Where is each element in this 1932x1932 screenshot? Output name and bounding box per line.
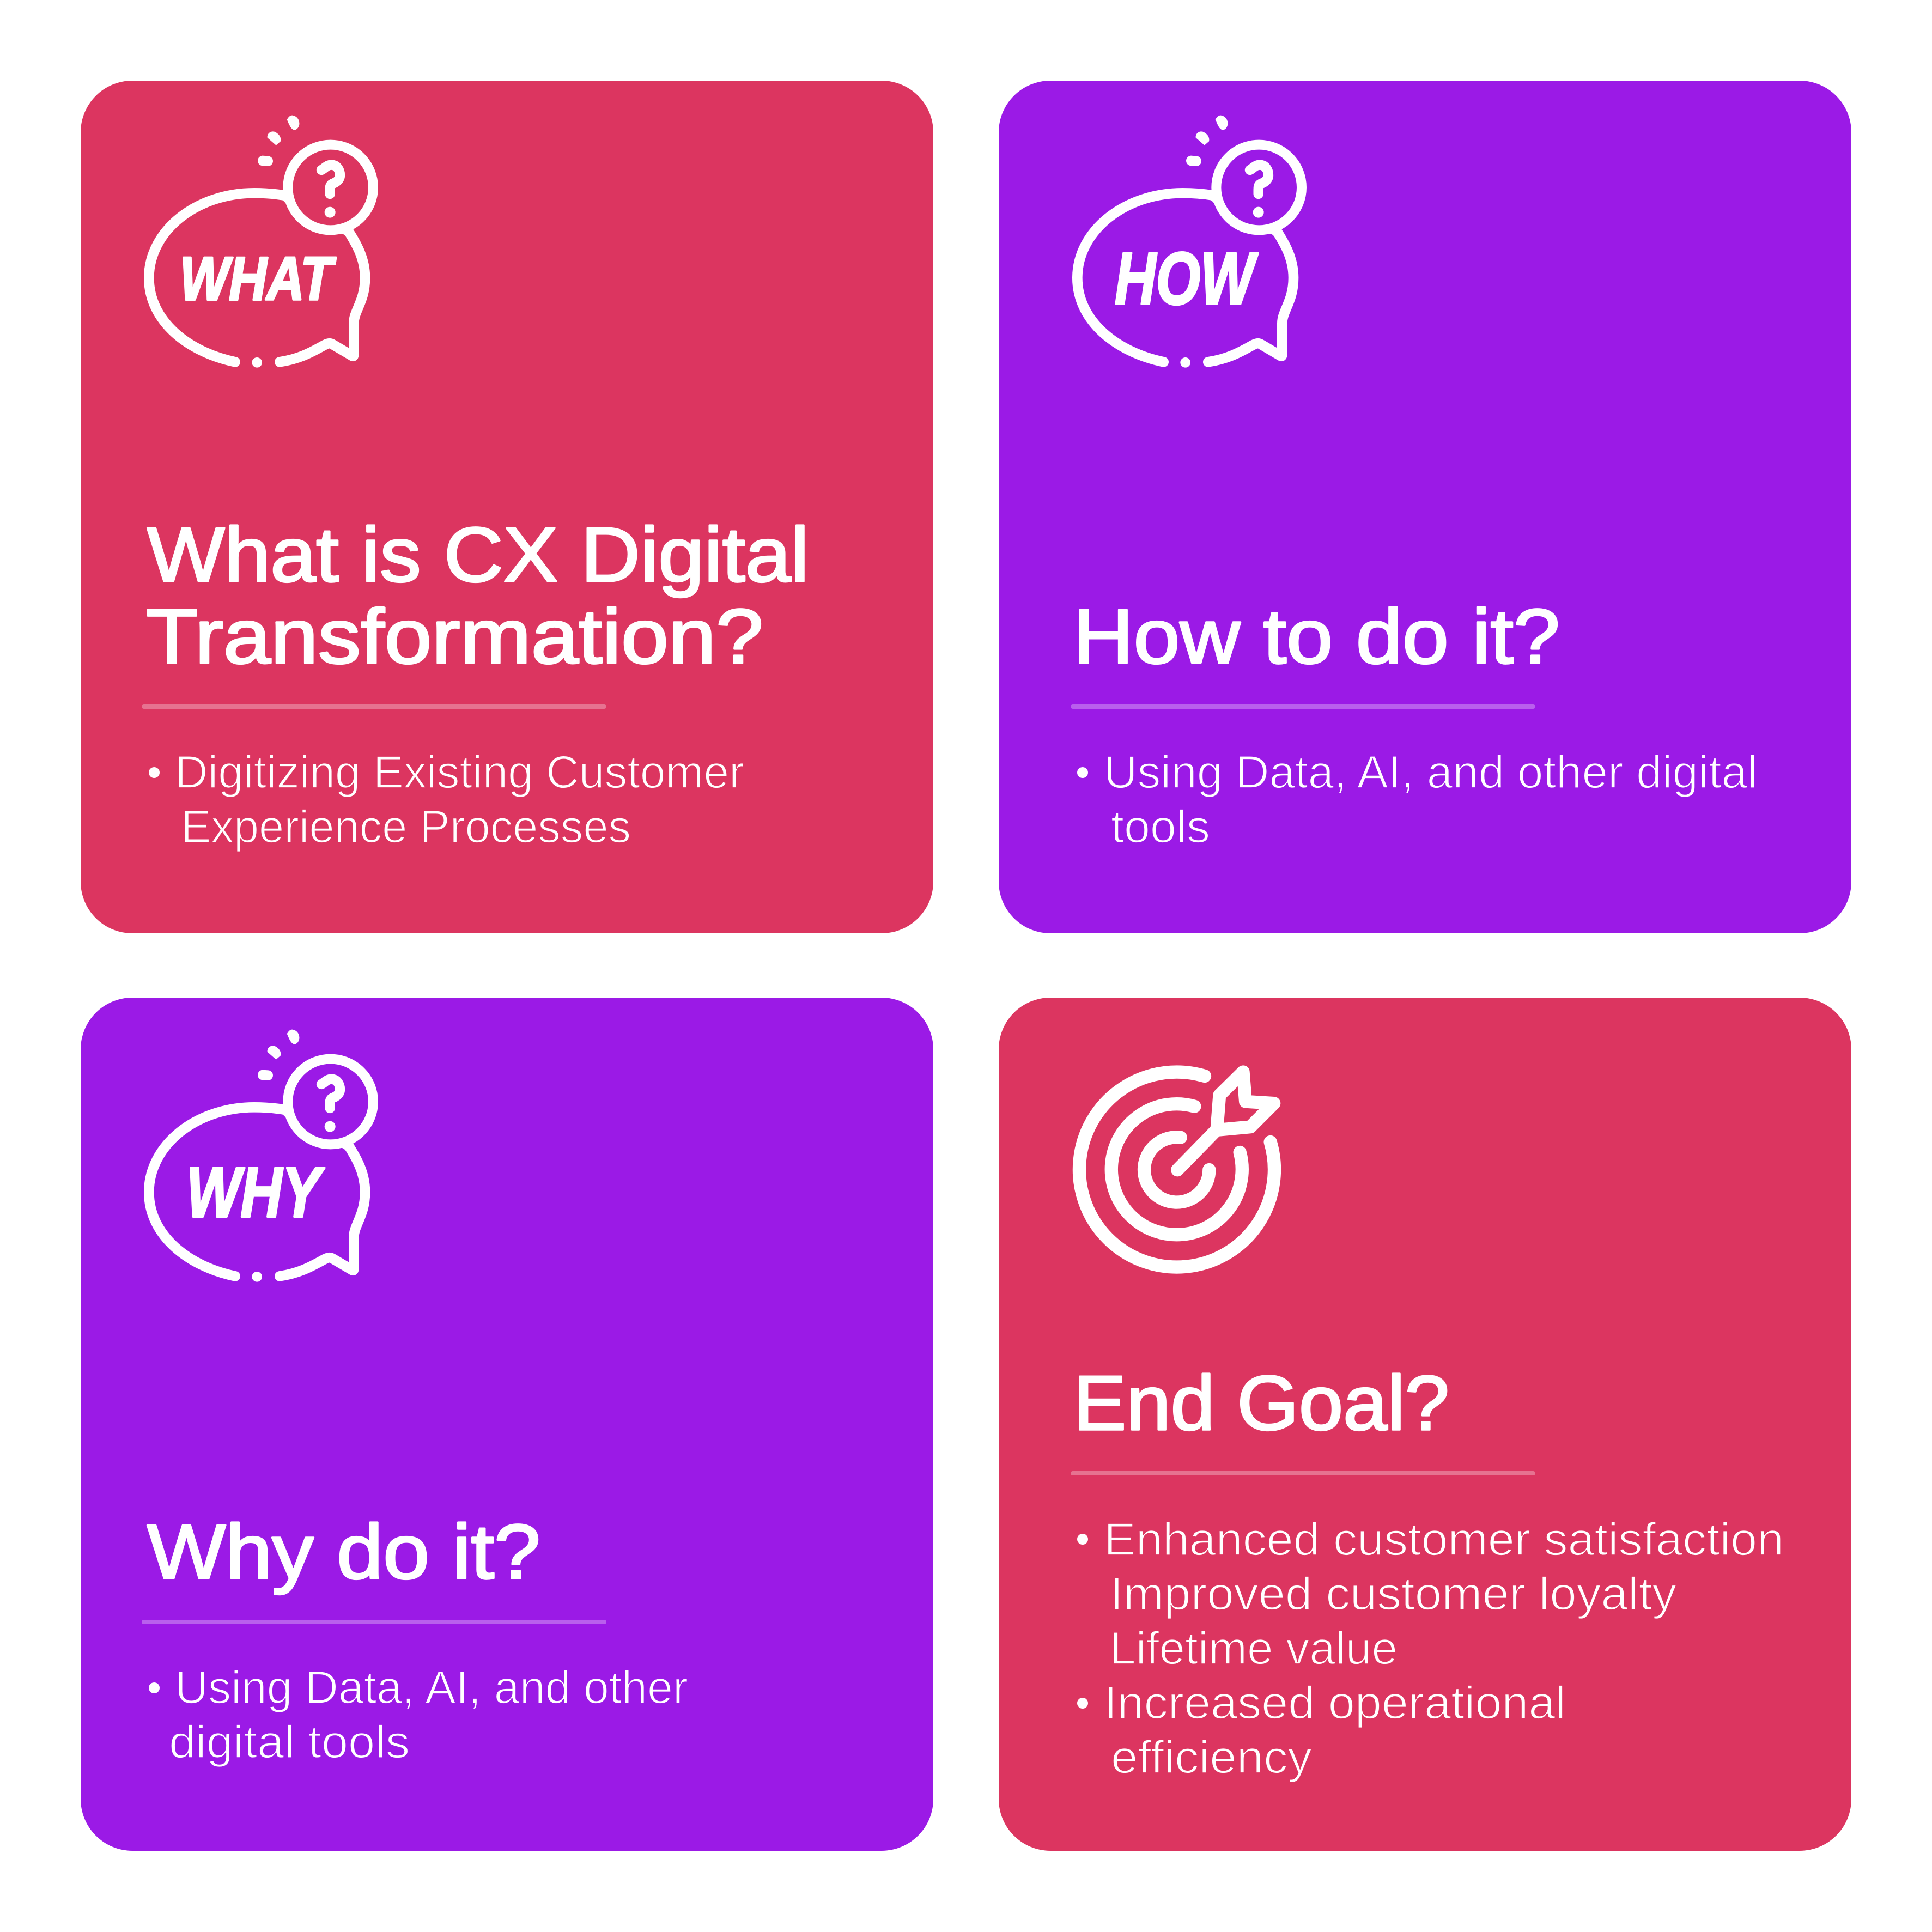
bullet list: why: Using Data, AI, and other	[175, 1662, 688, 1713]
card background: how	[999, 81, 1851, 933]
bullet list: end goal: Increased operational	[1104, 1677, 1566, 1728]
bullet list: end goal: Improved customer loyalty	[1110, 1568, 1676, 1619]
panel: End Goal	[999, 998, 1851, 1851]
divider: why	[142, 1620, 606, 1624]
bullet list: how: tools	[1111, 801, 1210, 852]
card background: what	[81, 81, 933, 933]
bullet list: why: digital tools	[169, 1716, 410, 1767]
bullet list: end goal: Enhanced customer satisfaction	[1104, 1514, 1784, 1565]
icon: HOW speech bubble with question mark: HOW	[1115, 237, 1259, 320]
bullet list: why	[149, 1662, 688, 1767]
bullet list: what	[149, 746, 744, 852]
heading: how: How to do it?	[1073, 593, 1560, 680]
bullet list: what: Digitizing Existing Customer	[175, 746, 744, 798]
bullet list: how	[1077, 746, 1758, 852]
divider: how	[1071, 704, 1535, 709]
bullet list: how: Using Data, AI, and other digital	[1104, 746, 1758, 798]
card background: why	[81, 998, 933, 1851]
icon: WHAT speech bubble with question mark: WHAT	[180, 245, 336, 313]
bullet list: end goal: efficiency	[1111, 1731, 1312, 1783]
heading: what: Transformation?	[146, 593, 763, 680]
card background: end goal	[999, 998, 1851, 1851]
panel: Why do it	[81, 998, 933, 1851]
bullet list: what: Experience Processes	[181, 801, 631, 852]
icon: HOW speech bubble with question mark	[1077, 116, 1302, 368]
icon: WHY speech bubble with question mark	[149, 1030, 373, 1282]
heading: end goal: End Goal?	[1073, 1360, 1449, 1447]
divider: what	[142, 704, 606, 709]
bullet list: end goal	[1077, 1514, 1784, 1783]
heading: why: Why do it?	[147, 1509, 540, 1595]
heading: what	[146, 512, 809, 680]
panel: How to do it	[999, 81, 1851, 933]
divider: end goal	[1071, 1471, 1535, 1475]
icon: target with arrow	[1079, 1072, 1274, 1267]
panel: What is CX Digital Transformation	[81, 81, 933, 933]
icon: WHY speech bubble with question mark: WHY	[186, 1152, 325, 1232]
icon: WHAT speech bubble with question mark	[149, 116, 373, 368]
heading: what: What is CX Digital	[147, 512, 809, 598]
bullet list: end goal: Lifetime value	[1110, 1623, 1398, 1674]
